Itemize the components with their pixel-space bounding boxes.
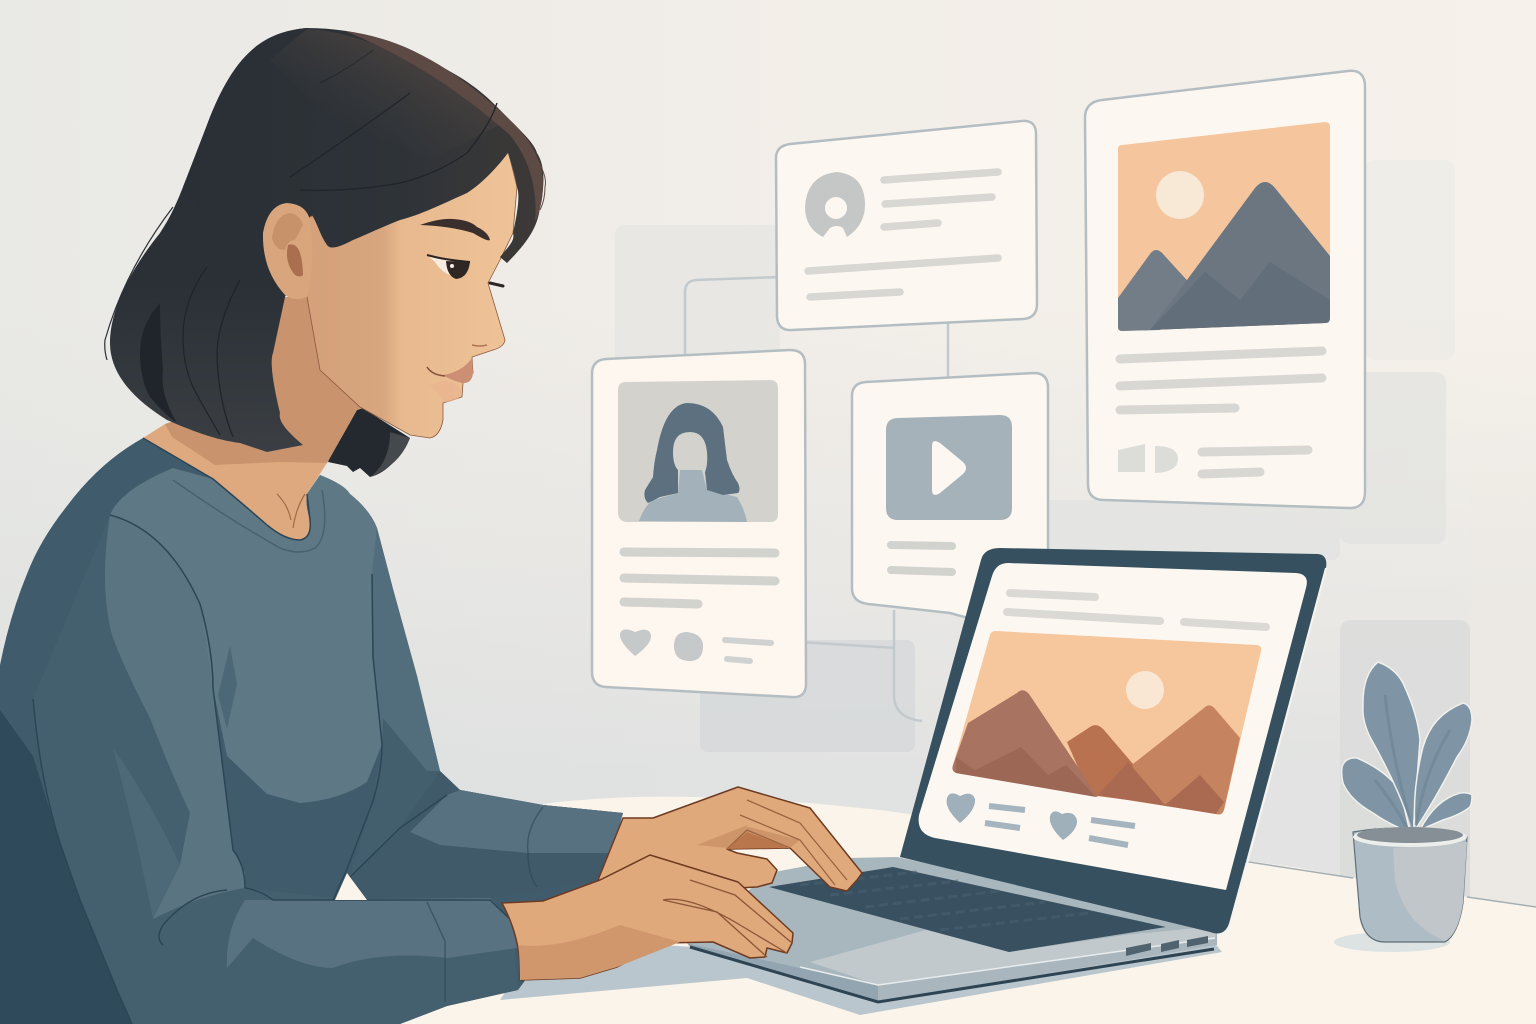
desk [0, 797, 1536, 1024]
screen image: sunset mountains [952, 631, 1261, 814]
hair strand lines [183, 50, 497, 437]
video thumbnail with play icon [886, 415, 1012, 520]
laptop screen [919, 563, 1307, 890]
panel: video card [852, 373, 1048, 640]
panel: right image card [1085, 71, 1365, 508]
arm mid tone [33, 515, 518, 1024]
sweater seams [33, 438, 543, 1024]
ports [1126, 936, 1208, 956]
top of hair [140, 28, 546, 437]
plant in pot [1334, 662, 1472, 952]
back hair [110, 28, 400, 452]
panel: left profile card [592, 350, 806, 697]
chest highlight [110, 468, 382, 803]
back shadow [0, 710, 132, 1024]
laptop [500, 548, 1326, 1015]
screen reactions [947, 793, 1077, 840]
panel: top profile card [776, 121, 1037, 330]
mouth and lips [427, 358, 473, 402]
image placeholder: person [618, 380, 778, 522]
sweater [0, 438, 623, 1024]
eye [427, 255, 503, 286]
face [285, 150, 517, 438]
front forearm highlight [227, 898, 517, 968]
screen header lines [1007, 593, 1266, 627]
gap between arms [335, 873, 367, 900]
plant shadow [1334, 932, 1450, 952]
right arm [350, 528, 440, 877]
icons: reactions [620, 629, 703, 661]
person [0, 28, 623, 1024]
connector lines between cards [685, 277, 948, 721]
laptop shadow [500, 940, 1222, 1015]
lower hand [502, 855, 793, 980]
stray hair strand [105, 207, 173, 360]
nose shadow [472, 345, 487, 346]
laptop lid [900, 548, 1326, 934]
upper sleeve highlight [105, 515, 245, 919]
icon: avatar [805, 172, 865, 237]
laptop base [687, 857, 1217, 1002]
text lines [891, 545, 952, 572]
text lines [624, 552, 775, 604]
ear [263, 203, 312, 299]
pot [1353, 827, 1467, 942]
hair behind neck [328, 400, 410, 477]
neck [143, 297, 390, 540]
back forearm [350, 771, 623, 900]
keyboard [769, 867, 1166, 952]
image placeholder: mountains and sun [1118, 122, 1330, 331]
text lines [808, 172, 998, 297]
upper hand [598, 787, 862, 891]
eyebrow [420, 219, 490, 240]
icons: reactions [1118, 444, 1178, 473]
leaves [1342, 662, 1472, 833]
text lines [1120, 351, 1322, 474]
